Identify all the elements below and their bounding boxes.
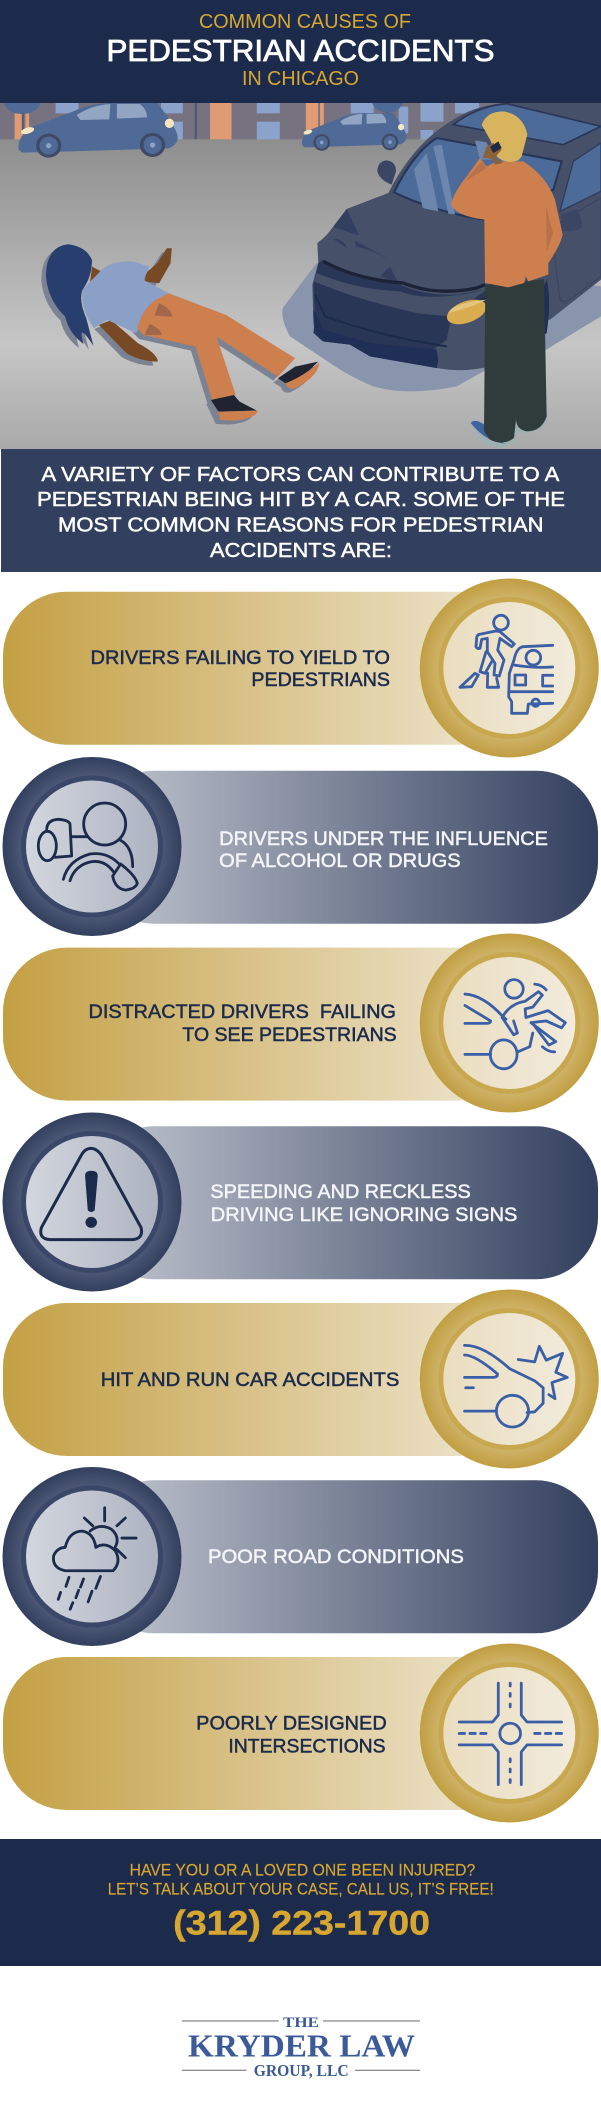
crashed car bbox=[282, 103, 601, 391]
standing man on phone bbox=[451, 111, 563, 448]
call to action text: HAVE YOU OR A LOVED ONE BEEN INJURED? bbox=[130, 1861, 475, 1879]
badge: poorly designed intersections bbox=[420, 1644, 599, 1822]
text: under the influence: DRIVERS UNDER THE INFLUENCE bbox=[219, 828, 548, 850]
text: poor road conditions: POOR ROAD CONDITIONS bbox=[208, 1546, 464, 1568]
buildings backdrop bbox=[0, 103, 601, 141]
heading: common causes of: COMMON CAUSES OF bbox=[199, 11, 411, 33]
call to action text: LET’S TALK ABOUT YOUR CASE, CALL US, IT’S FREE! bbox=[108, 1881, 494, 1899]
panel: poorly designed intersections bbox=[3, 1644, 599, 1822]
text: failing to yield bbox=[90, 647, 390, 691]
text: distracted drivers: DISTRACTED DRIVERS FAILING bbox=[88, 1001, 396, 1023]
heading: in chicago: IN CHICAGO bbox=[242, 68, 359, 90]
icon: driver with drink bbox=[38, 803, 137, 890]
panel: distracted drivers bbox=[3, 934, 599, 1112]
text: failing to yield: PEDESTRIANS bbox=[251, 669, 390, 691]
icon: pedestrian and car bbox=[460, 615, 553, 713]
logo: The Kryder Law Group, LLC bbox=[182, 2015, 420, 2080]
parked car right bbox=[302, 113, 406, 151]
text: speeding and reckless: DRIVING LIKE IGNORING SIGNS bbox=[211, 1204, 517, 1226]
badge: under the influence bbox=[2, 757, 182, 936]
logo: The Kryder Law Group, LLC: THE bbox=[283, 2015, 319, 2031]
badge: hit and run bbox=[420, 1290, 599, 1468]
panel: failing to yield bbox=[3, 578, 599, 758]
icon: intersection bbox=[459, 1683, 562, 1785]
text: under the influence bbox=[219, 828, 548, 872]
text: speeding and reckless bbox=[210, 1181, 517, 1226]
title: PEDESTRIAN ACCIDENTS bbox=[106, 34, 494, 68]
panel: poor road conditions bbox=[2, 1467, 598, 1646]
header banner bbox=[0, 0, 601, 103]
intro text: A VARIETY OF FACTORS CAN CONTRIBUTE TO A bbox=[41, 463, 560, 486]
badge: distracted drivers bbox=[420, 934, 599, 1112]
icon: rain cloud and sun bbox=[53, 1508, 136, 1609]
call to action text bbox=[108, 1861, 494, 1899]
badge: failing to yield bbox=[420, 578, 599, 758]
text: poorly designed intersections: POORLY DESIGNED bbox=[196, 1712, 387, 1734]
panel: under the influence bbox=[2, 757, 598, 936]
text: poorly designed intersections bbox=[196, 1712, 387, 1757]
parked car left bbox=[18, 103, 178, 158]
road bbox=[0, 139, 601, 449]
intro panel bbox=[1, 449, 601, 572]
badge: speeding and reckless bbox=[2, 1112, 182, 1292]
fallen woman shadow bbox=[41, 248, 314, 425]
fallen woman bbox=[46, 244, 319, 421]
logo: The Kryder Law Group, LLC: GROUP, LLC bbox=[254, 2061, 349, 2080]
text: distracted drivers bbox=[88, 1001, 397, 1046]
text: hit and run: HIT AND RUN CAR ACCIDENTS bbox=[101, 1369, 399, 1391]
text: poorly designed intersections: INTERSECTIONS bbox=[228, 1735, 386, 1757]
text: speeding and reckless: SPEEDING AND RECKLESS bbox=[210, 1181, 471, 1203]
text: under the influence: OF ALCOHOL OR DRUGS bbox=[219, 850, 461, 872]
icon: person hit by car bbox=[465, 980, 565, 1069]
phone number: (312) 223-1700 bbox=[173, 1905, 430, 1943]
panel: hit and run bbox=[3, 1290, 599, 1468]
call to action banner bbox=[0, 1839, 601, 1966]
logo: The Kryder Law Group, LLC: KRYDER LAW bbox=[188, 2028, 415, 2064]
text: failing to yield: DRIVERS FAILING TO YIELD TO bbox=[90, 647, 390, 669]
intro text: MOST COMMON REASONS FOR PEDESTRIAN bbox=[58, 514, 544, 537]
intro text bbox=[37, 463, 565, 562]
icon: warning triangle bbox=[41, 1148, 142, 1240]
intro text: ACCIDENTS ARE: bbox=[210, 539, 392, 562]
badge: poor road conditions bbox=[2, 1467, 182, 1646]
intro text: PEDESTRIAN BEING HIT BY A CAR. SOME OF THE bbox=[37, 488, 565, 511]
text: distracted drivers: TO SEE PEDESTRIANS bbox=[182, 1024, 397, 1046]
panel: speeding and reckless bbox=[2, 1112, 598, 1292]
icon: car collision bbox=[465, 1345, 567, 1427]
illustration: pedestrian accident street scene bbox=[0, 103, 601, 449]
